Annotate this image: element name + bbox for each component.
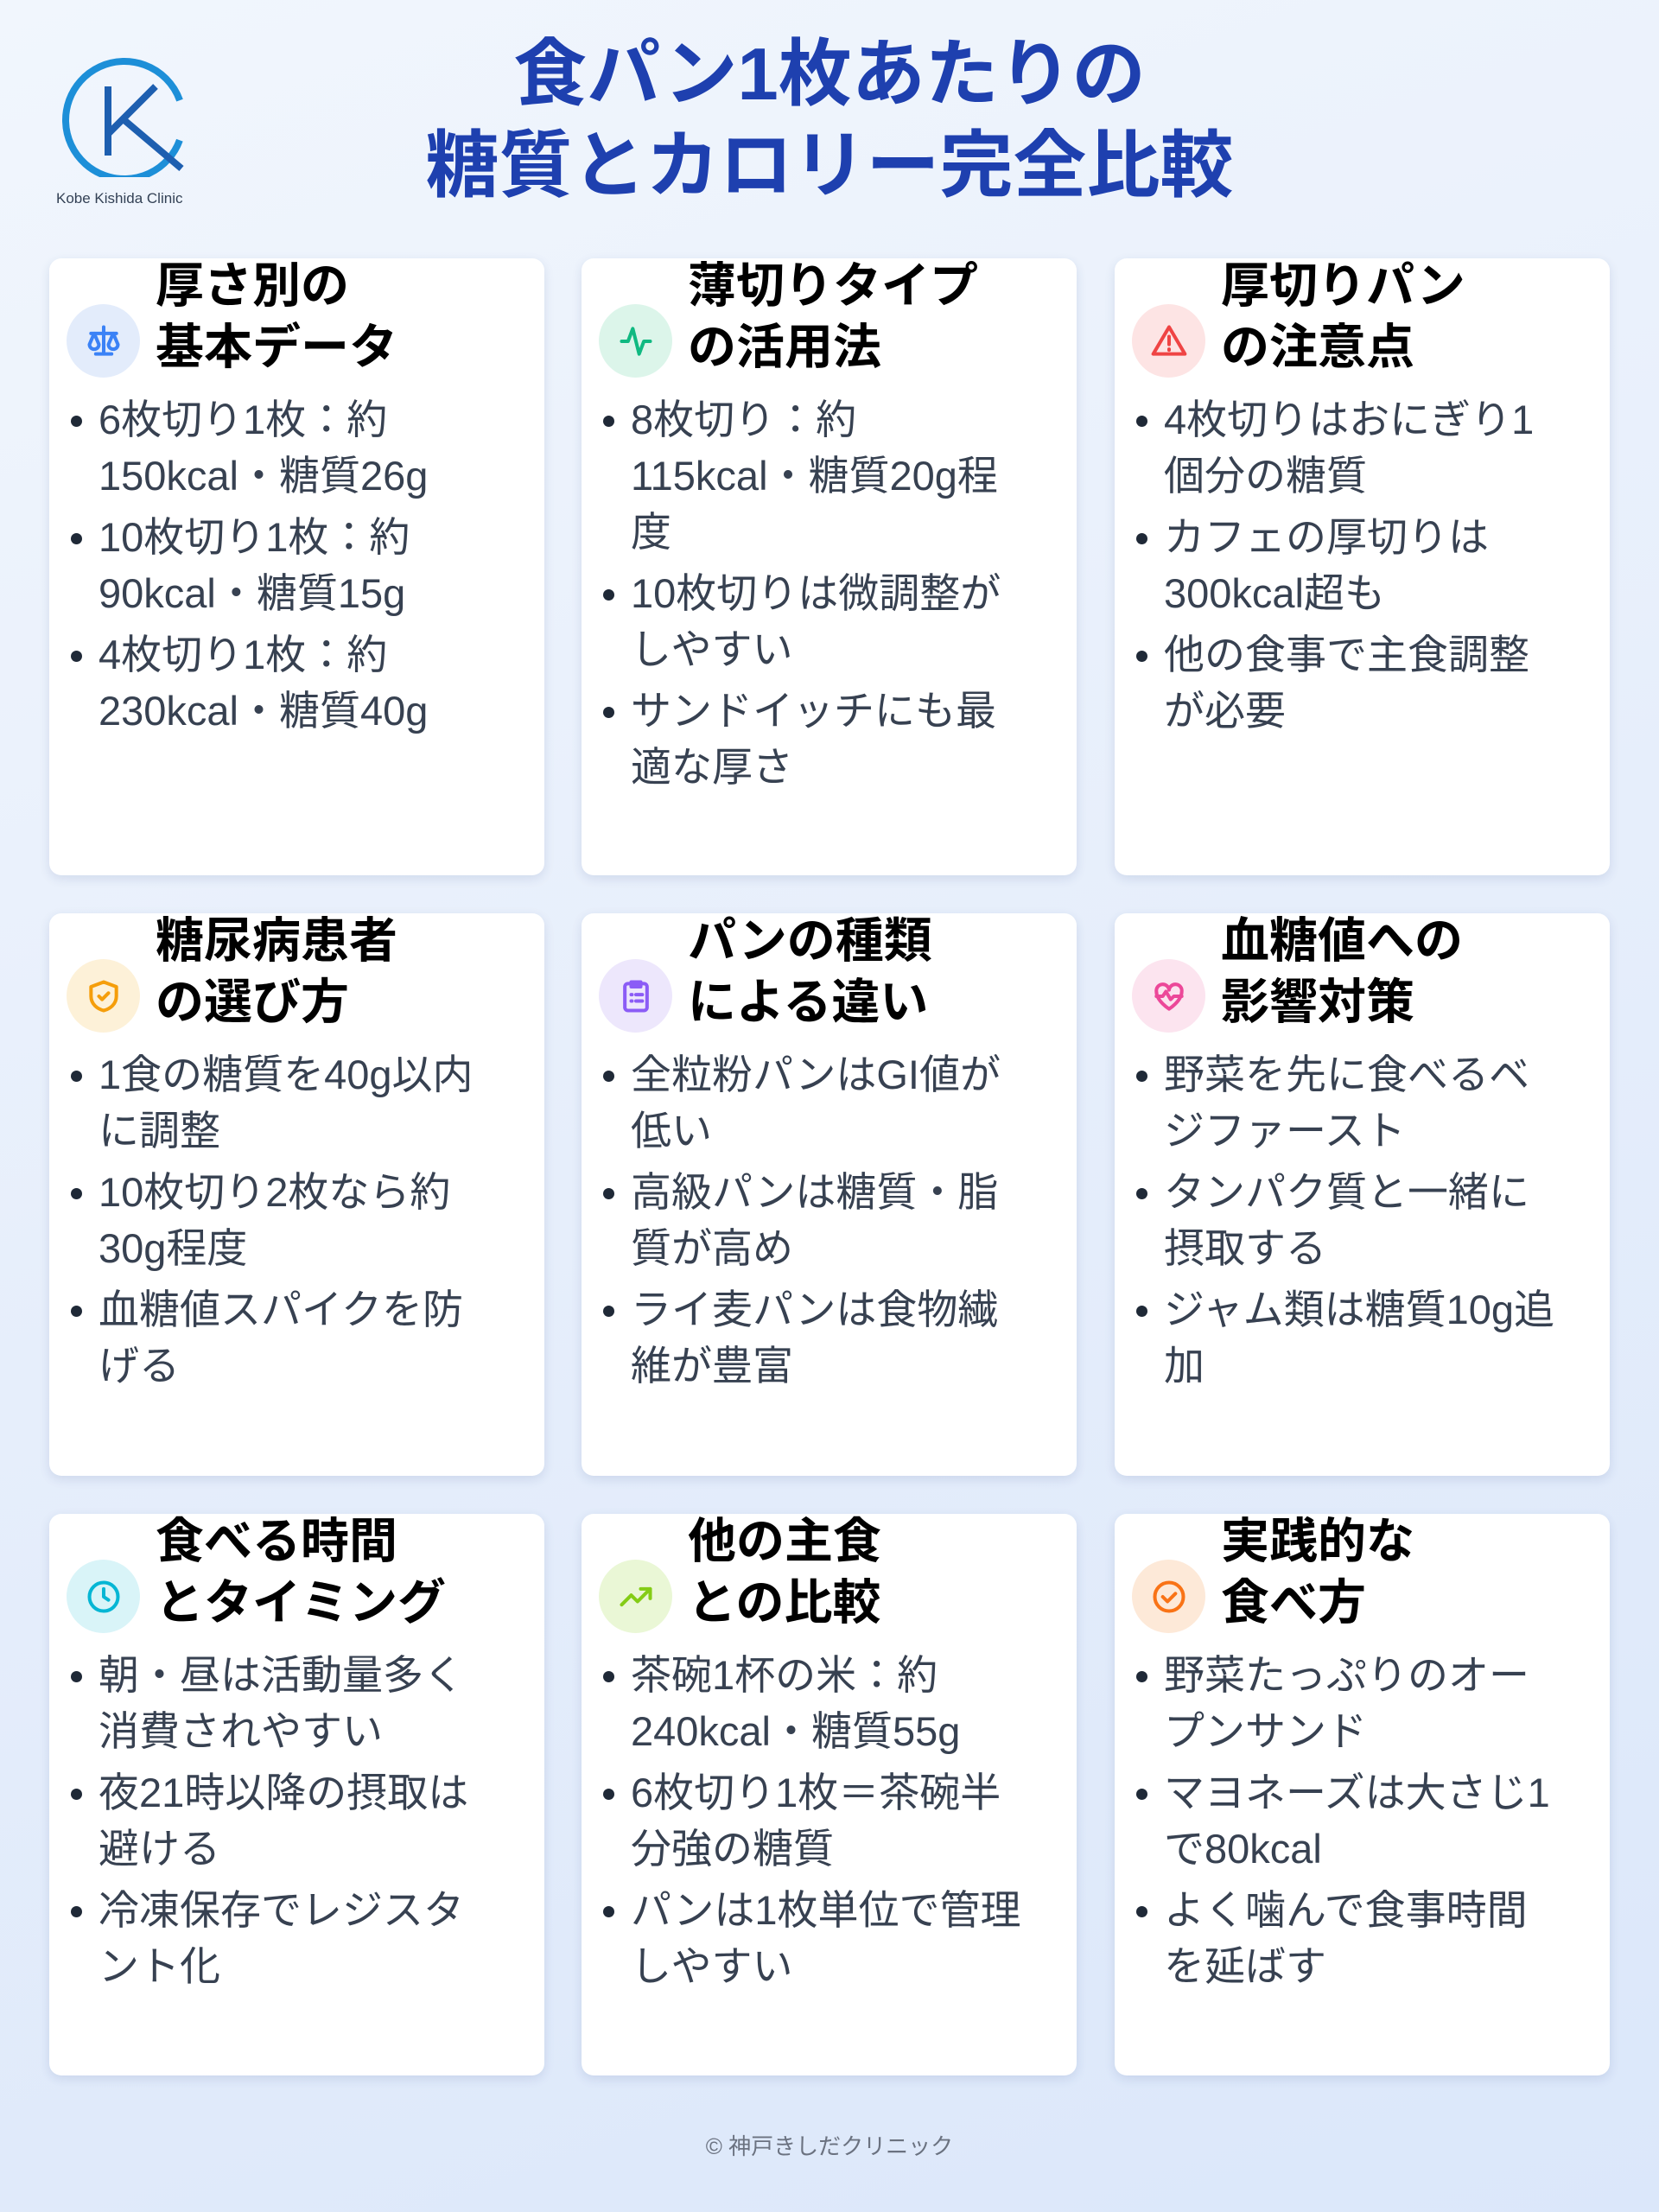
- bullets: しやすい: [631, 626, 793, 672]
- bullets: [1136, 1052, 1554, 1389]
- panel: timing: [49, 1514, 544, 2075]
- bullets: [71, 397, 428, 734]
- bullets: 高級パンは糖質・脂: [631, 1169, 998, 1215]
- heading: との比較: [688, 1575, 880, 1630]
- bullets: 8枚切り：約: [631, 397, 856, 442]
- bullets: マヨネーズは大さじ1: [1164, 1770, 1550, 1815]
- bullets: 6枚切り1枚＝茶碗半: [631, 1770, 1001, 1815]
- bullets: 朝・昼は活動量多く: [99, 1652, 464, 1698]
- icon: warning: [1132, 304, 1205, 378]
- bullets: 度: [631, 509, 671, 555]
- bullets: しやすい: [631, 1943, 793, 1989]
- bullets: 全粒粉パンはGI値が: [631, 1052, 1001, 1097]
- icon: heart pulse: [1132, 959, 1205, 1033]
- bullets: タンパク質と一緒に: [1164, 1169, 1529, 1215]
- bullets: ジファースト: [1164, 1108, 1406, 1154]
- panel: bread types: [582, 913, 1077, 1476]
- icon: shield: [67, 959, 140, 1033]
- bullets: 他の食事で主食調整: [1164, 632, 1529, 677]
- heading: [1221, 913, 1463, 1029]
- bullets: [1136, 1652, 1550, 1989]
- icon: check circle: [1132, 1560, 1205, 1633]
- bullets: 230kcal・糖質40g: [99, 688, 428, 734]
- bullets: に調整: [99, 1108, 220, 1154]
- heading: [1221, 258, 1465, 374]
- logo: Kobe Kishida Clinic: [56, 190, 182, 207]
- bullets: 質が高め: [631, 1225, 793, 1271]
- bullets: 摂取する: [1164, 1225, 1326, 1271]
- bullets: げる: [99, 1343, 180, 1389]
- panel: basic data: [49, 258, 544, 875]
- heading: 他の主食: [688, 1514, 881, 1568]
- bullets: 夜21時以降の摂取は: [99, 1770, 468, 1815]
- bullets: が必要: [1164, 688, 1286, 734]
- heading: 食べ方: [1221, 1575, 1366, 1630]
- heading: パンの種類: [688, 913, 932, 968]
- bullets: 6枚切り1枚：約: [99, 397, 387, 442]
- title: [425, 34, 1234, 207]
- bullets: 300kcal超も: [1164, 570, 1385, 616]
- bullets: ジャム類は糖質10g追: [1164, 1287, 1554, 1332]
- panel: thick slice: [1115, 258, 1610, 875]
- heading: の活用法: [688, 320, 881, 374]
- heading: [1221, 1514, 1414, 1630]
- bullets: 115kcal・糖質20g程: [631, 453, 998, 499]
- heading: [688, 258, 978, 374]
- heading: 厚切りパン: [1221, 258, 1465, 313]
- heading: 糖尿病患者: [156, 913, 397, 968]
- heading: 影響対策: [1221, 975, 1414, 1029]
- heading: 薄切りタイプ: [688, 258, 978, 313]
- bullets: 消費されやすい: [99, 1708, 383, 1754]
- panel: other staples: [582, 1514, 1077, 2075]
- bullets: サンドイッチにも最: [631, 688, 996, 734]
- bullets: 240kcal・糖質55g: [631, 1708, 960, 1754]
- panel: blood sugar: [1115, 913, 1610, 1476]
- heading: とタイミング: [156, 1575, 446, 1630]
- bullets: パンは1枚単位で管理: [631, 1887, 1021, 1933]
- icon: clock: [67, 1560, 140, 1633]
- heading: 食べる時間: [156, 1514, 397, 1568]
- bullets: プンサンド: [1164, 1708, 1367, 1754]
- bullets: カフェの厚切りは: [1164, 514, 1489, 560]
- bullets: 30g程度: [99, 1225, 247, 1271]
- panel: practical: [1115, 1514, 1610, 2075]
- bullets: [603, 1052, 1001, 1389]
- bullets: 加: [1164, 1343, 1205, 1389]
- bullets: 血糖値スパイクを防: [99, 1287, 463, 1332]
- heading: の選び方: [156, 975, 349, 1029]
- icon: trending up: [599, 1560, 672, 1633]
- heading: [156, 1514, 446, 1630]
- title: 糖質とカロリー完全比較: [425, 125, 1234, 207]
- heading: [688, 913, 932, 1029]
- bullets: 野菜たっぷりのオー: [1164, 1652, 1529, 1698]
- bullets: 10枚切りは微調整が: [631, 570, 1001, 616]
- icon: scale: [67, 304, 140, 378]
- bullets: 適な厚さ: [631, 744, 793, 790]
- title: 食パン1枚あたりの: [513, 34, 1146, 116]
- bullets: よく噛んで食事時間: [1164, 1887, 1528, 1933]
- heading: 厚さ別の: [156, 258, 349, 313]
- bullets: 維が豊富: [631, 1343, 793, 1389]
- bullets: 1食の糖質を40g以内: [99, 1052, 474, 1097]
- heading: による違い: [688, 975, 928, 1029]
- bullets: 10枚切り2枚なら約: [99, 1169, 450, 1215]
- bullets: 個分の糖質: [1164, 453, 1367, 499]
- bullets: 90kcal・糖質15g: [99, 570, 405, 616]
- bullets: 4枚切り1枚：約: [99, 632, 387, 677]
- bullets: 避ける: [99, 1826, 220, 1872]
- bullets: 野菜を先に食べるベ: [1164, 1052, 1529, 1097]
- heading: の注意点: [1221, 320, 1414, 374]
- panel: thin slice: [582, 258, 1077, 875]
- bullets: で80kcal: [1164, 1826, 1322, 1872]
- bullets: [71, 1052, 474, 1389]
- bullets: 10枚切り1枚：約: [99, 514, 410, 560]
- bullets: を延ばす: [1164, 1943, 1326, 1989]
- bullets: ライ麦パンは食物繊: [631, 1287, 998, 1332]
- bullets: 茶碗1杯の米：約: [631, 1652, 938, 1698]
- heading: 基本データ: [156, 320, 397, 374]
- heading: [688, 1514, 881, 1630]
- bullets: [1136, 397, 1534, 734]
- logo: [56, 58, 183, 207]
- bullets: 150kcal・糖質26g: [99, 453, 428, 499]
- heading: 実践的な: [1221, 1514, 1414, 1568]
- bullets: [603, 397, 1001, 790]
- bullets: ント化: [99, 1943, 220, 1989]
- bullets: 低い: [631, 1108, 712, 1154]
- heading: [156, 258, 397, 374]
- heading: 血糖値への: [1221, 913, 1463, 968]
- heading: [156, 913, 397, 1029]
- bullets: [603, 1652, 1021, 1989]
- bullets: 冷凍保存でレジスタ: [99, 1887, 464, 1933]
- panel: diabetes: [49, 913, 544, 1476]
- icon: activity: [599, 304, 672, 378]
- footer: © 神戸きしだクリニック: [706, 2133, 953, 2159]
- bullets: 分強の糖質: [631, 1826, 834, 1872]
- bullets: [71, 1652, 468, 1989]
- icon: clipboard: [599, 959, 672, 1033]
- bullets: 4枚切りはおにぎり1: [1164, 397, 1534, 442]
